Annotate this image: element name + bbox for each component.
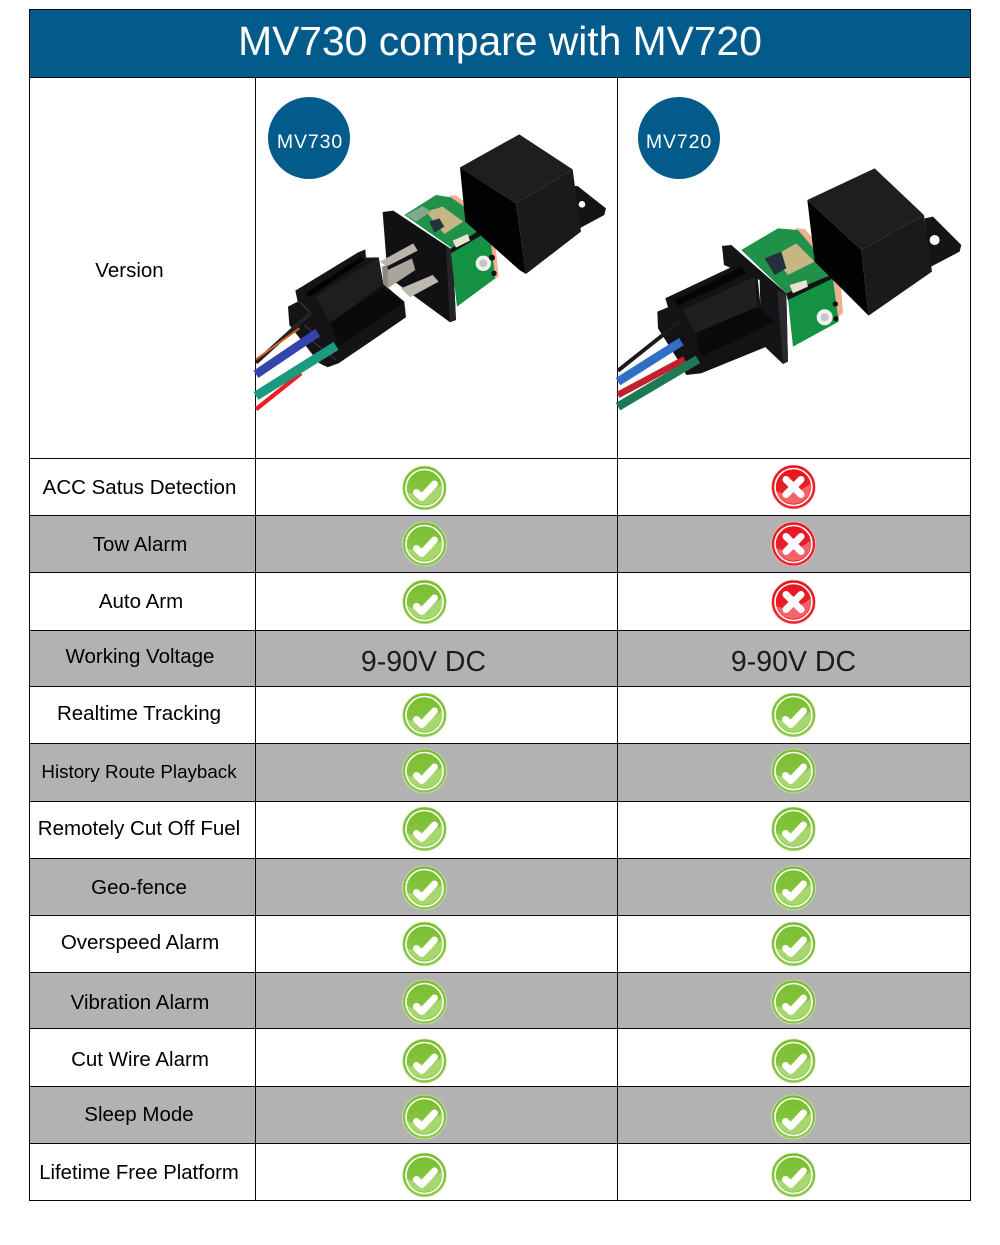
label: Version: Version xyxy=(95,259,164,282)
MV730 column marks xyxy=(361,466,486,1197)
yes: Vibration Alarm xyxy=(772,980,816,1024)
label: Overspeed Alarm: Overspeed Alarm xyxy=(61,931,219,954)
product photo: MV720 relay tracker xyxy=(618,168,961,407)
yes: Overspeed Alarm xyxy=(402,922,446,966)
wires xyxy=(256,313,336,396)
yes: Remotely Cut Off Fuel xyxy=(402,807,446,851)
label: Realtime Tracking: Realtime Tracking xyxy=(57,702,221,725)
yes: ACC Satus Detection xyxy=(402,466,446,510)
yes: Lifetime Free Platform xyxy=(772,1153,816,1197)
yes: Cut Wire Alarm xyxy=(772,1039,816,1083)
yes: Tow Alarm xyxy=(402,522,446,566)
red wire xyxy=(256,373,301,409)
yes: Auto Arm xyxy=(402,580,446,624)
flange xyxy=(722,245,788,364)
voltage value: 9-90V DC xyxy=(731,646,856,678)
label: Working Voltage: Working Voltage xyxy=(66,645,214,668)
label: Tow Alarm: Tow Alarm xyxy=(93,533,187,556)
badge: MV730: MV730 xyxy=(277,131,343,153)
label: Sleep Mode: Sleep Mode xyxy=(84,1103,194,1126)
relay cover xyxy=(925,217,961,267)
yes: History Route Playback xyxy=(772,749,816,793)
yes: History Route Playback xyxy=(402,749,446,793)
no: Tow Alarm xyxy=(772,522,816,566)
label: ACC Satus Detection: ACC Satus Detection xyxy=(43,476,236,499)
terminals xyxy=(380,243,418,267)
yes: Cut Wire Alarm xyxy=(402,1039,446,1083)
flange xyxy=(383,211,456,322)
badge: MV720: MV720 xyxy=(646,131,712,153)
yes: Realtime Tracking xyxy=(402,693,446,737)
yes: Vibration Alarm xyxy=(402,980,446,1024)
circuit board xyxy=(795,228,843,317)
yes: Geo-fence xyxy=(402,866,446,910)
badge: MV720 xyxy=(638,97,720,179)
wires xyxy=(618,322,698,407)
no: ACC Satus Detection xyxy=(772,465,816,509)
yes: Lifetime Free Platform xyxy=(402,1153,446,1197)
yes: Sleep Mode xyxy=(402,1095,446,1139)
no: Auto Arm xyxy=(772,580,816,624)
yes: Realtime Tracking xyxy=(772,693,816,737)
label: Auto Arm: Auto Arm xyxy=(99,590,183,613)
row labels xyxy=(38,259,240,1184)
yes: Overspeed Alarm xyxy=(772,922,816,966)
yes: Remotely Cut Off Fuel xyxy=(772,807,816,851)
relay cover xyxy=(573,186,606,229)
circuit board xyxy=(449,195,499,279)
label: Geo-fence: Geo-fence xyxy=(91,876,187,899)
voltage value: 9-90V DC xyxy=(361,646,486,678)
label: Lifetime Free Platform: Lifetime Free Platform xyxy=(39,1162,239,1184)
label: Vibration Alarm: Vibration Alarm xyxy=(71,991,209,1014)
connector xyxy=(657,262,775,375)
yes: Geo-fence xyxy=(772,866,816,910)
label: Remotely Cut Off Fuel: Remotely Cut Off Fuel xyxy=(38,817,240,840)
connector xyxy=(288,249,406,367)
label: Cut Wire Alarm: Cut Wire Alarm xyxy=(71,1048,209,1071)
product photo: MV730 relay tracker xyxy=(256,134,606,409)
title banner xyxy=(30,10,970,78)
label: History Route Playback: History Route Playback xyxy=(41,761,237,782)
badge: MV730 xyxy=(268,97,350,179)
MV720 column marks xyxy=(731,465,856,1197)
yes: Sleep Mode xyxy=(772,1095,816,1139)
title banner: MV730 compare with MV720 xyxy=(238,18,762,64)
